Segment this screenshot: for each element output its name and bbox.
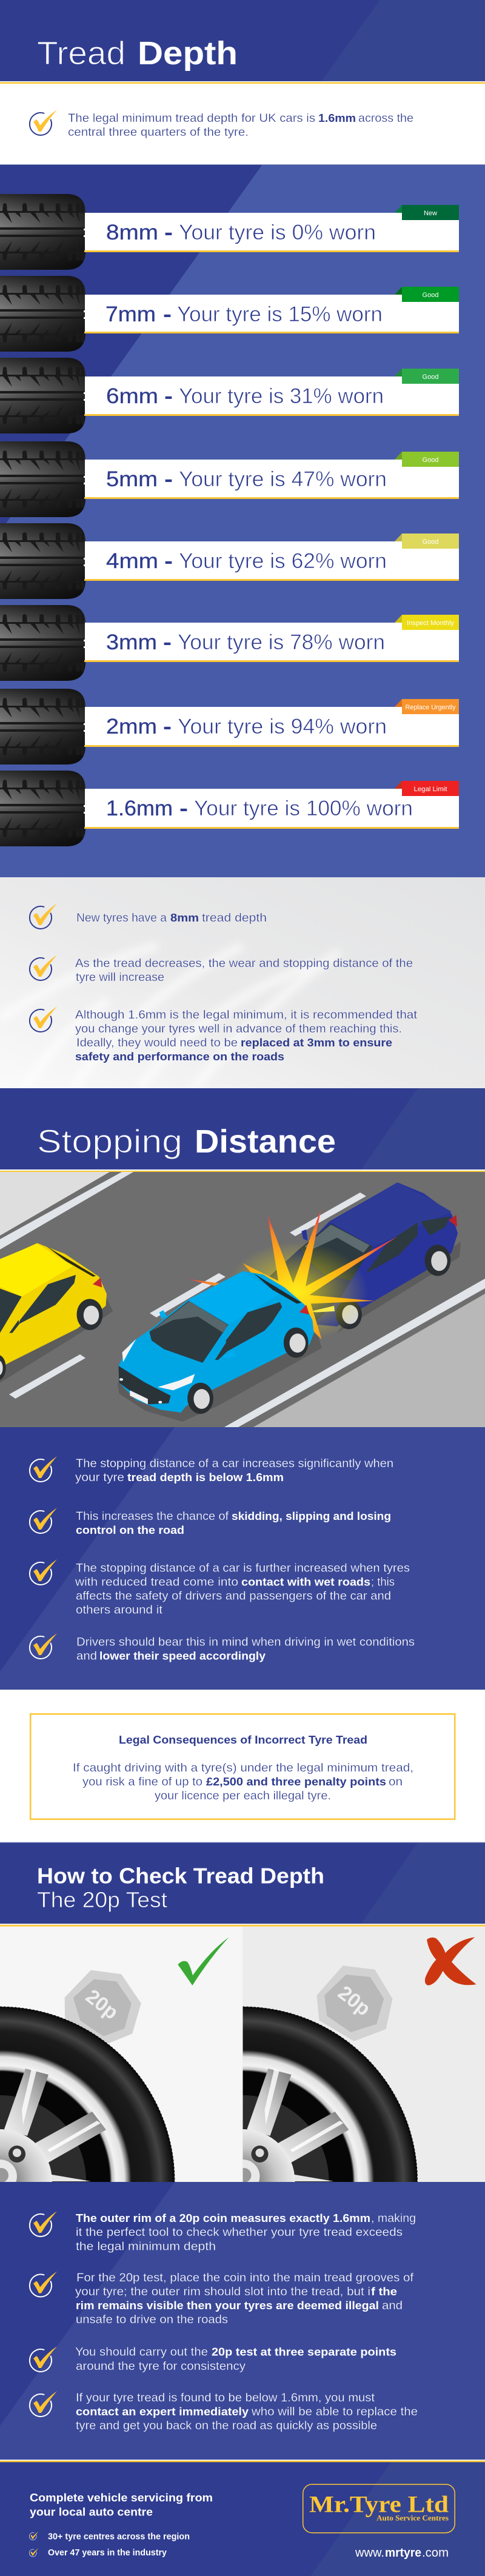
icon: check <box>30 955 57 980</box>
tyre image <box>0 523 85 599</box>
icon: coin 20p: 20p <box>334 1981 375 2020</box>
text: how to test: and <box>382 2300 403 2312</box>
text: 2mm: - <box>163 715 172 738</box>
text: website: .com <box>422 2546 449 2560</box>
text: 1.6mm: Your tyre is 100% worn <box>194 797 413 820</box>
ribbon: Good <box>395 287 459 302</box>
text: intro paragraph: 1.6mm <box>318 112 356 124</box>
text: website: mrtyre <box>385 2546 421 2560</box>
ribbon: Good: Good <box>423 292 438 299</box>
text: 5mm: Your tyre is 47% worn <box>179 467 387 491</box>
text: how to test: For the 20p test, place the coin into the main tread grooves of <box>76 2272 414 2284</box>
text: 7mm: - <box>163 303 172 326</box>
text: coin measure: the legal minimum depth <box>76 2241 216 2253</box>
text: how to test: f the <box>371 2285 397 2298</box>
icon: small check <box>29 2548 38 2557</box>
illustration: crash on the road <box>0 1172 485 1427</box>
text: 8mm new tyres: tread depth <box>202 912 267 925</box>
text: wet roads: others around it <box>76 1604 163 1616</box>
text: coin measure <box>76 2212 416 2253</box>
text: coin measure: The outer rim of a 20p coin measures exactly 1.6mm <box>76 2212 370 2224</box>
panel: stopping distance header <box>0 1088 485 1173</box>
text: fine details: you risk a fine of up to <box>82 1776 202 1788</box>
title: Tread Depth <box>37 35 238 72</box>
text: contact expert <box>76 2392 418 2432</box>
icon: check <box>30 2211 57 2236</box>
icon: check <box>30 1633 57 1659</box>
ribbon: Legal Limit: Legal Limit <box>413 786 447 793</box>
text: fine details: £2,500 and three penalty points <box>206 1775 386 1788</box>
text: wet roads: affects the safety of drivers and passengers of the car and <box>76 1590 391 1603</box>
text: wet roads: The stopping distance of a car is further increased when tyres <box>76 1562 410 1575</box>
icon: check <box>30 1456 57 1482</box>
text: 3mm: - <box>163 631 172 654</box>
ribbon: Good <box>395 534 459 549</box>
tyre image <box>0 358 85 433</box>
bar <box>84 295 459 333</box>
icon: coin 20p <box>65 1971 140 2042</box>
text: wear increases <box>75 957 413 984</box>
panel: intro legal minimum <box>30 110 413 139</box>
ribbon: Good: Good <box>423 538 438 546</box>
bar <box>84 707 459 747</box>
text: website <box>355 2546 449 2560</box>
text: lower speed: and <box>76 1650 97 1663</box>
text: 8mm: Your tyre is 0% worn <box>179 221 376 244</box>
text: wet roads: ; this <box>371 1576 395 1588</box>
text: three points <box>75 2345 396 2373</box>
row: 4mm <box>0 523 459 599</box>
bar <box>84 541 459 581</box>
text: contact expert: If your tyre tread is found to be below 1.6mm, you must <box>76 2392 375 2404</box>
heading: complete vehicle servicing: Complete vehicle servicing from <box>30 2491 213 2504</box>
illustration: wheel <box>0 2007 175 2182</box>
car: blue <box>118 1271 322 1422</box>
text: fine details: If caught driving with a tyre(s) under the legal minimum tread, <box>73 1762 413 1775</box>
icon: coin 20p <box>318 1966 392 2041</box>
title: How to Check Tread Depth: How to Check Tread Depth <box>37 1864 324 1888</box>
icon: check <box>30 1559 57 1585</box>
bar <box>84 623 459 662</box>
text: wet roads: with reduced tread come into <box>75 1576 238 1588</box>
text: skidding: This increases the chance of <box>76 1510 229 1523</box>
icon: check <box>30 110 57 135</box>
text: wet roads <box>75 1562 410 1616</box>
bar <box>84 789 459 829</box>
text: contact expert: tyre and get you back on the road as quickly as possible <box>76 2420 377 2432</box>
logo: Mr.Tyre Ltd <box>303 2484 455 2533</box>
text: contact expert: who will be able to replace the <box>251 2406 418 2418</box>
text: 2mm: 2mm <box>106 715 157 738</box>
text: how to test: rim remains visible then your tyres are deemed illegal <box>76 2299 379 2312</box>
text: 8mm new tyres <box>76 911 267 925</box>
row: 1.6mm <box>0 771 459 846</box>
text: recommended replacement: safety and performance on the roads <box>75 1050 284 1063</box>
ribbon: Legal Limit <box>395 781 459 796</box>
text: skidding: skidding, slipping and losing <box>232 1510 391 1522</box>
text: fine details: your licence per each illegal tyre. <box>155 1790 331 1802</box>
ribbon: New <box>395 205 459 220</box>
tyre image <box>0 689 85 764</box>
icon: coin 20p: 20p <box>82 1985 123 2024</box>
text: recommended replacement: Although 1.6mm is the legal minimum, it is recommended that <box>75 1009 418 1022</box>
text: stopping distance below 1.6mm: The stopping distance of a car increases significantly when <box>76 1457 393 1470</box>
text: 4mm: 4mm <box>106 549 158 573</box>
panel: 20p test passing <box>0 1927 242 2182</box>
callout: legal consequences <box>30 1714 455 1819</box>
text: 5mm: 5mm <box>106 467 158 491</box>
ribbon: Good: Good <box>423 373 438 381</box>
title: Stopping Distance: Distance <box>195 1123 336 1160</box>
text: intro paragraph: central three quarters of the tyre. <box>68 126 249 139</box>
text: intro paragraph: across the <box>358 112 413 125</box>
icon: green tick <box>178 1937 229 1986</box>
logo: Mr.Tyre Ltd: Mr.Tyre Ltd <box>309 2492 449 2517</box>
panel: new tyres notes <box>0 877 485 1088</box>
text: three points: You should carry out the <box>75 2346 208 2358</box>
text: 7mm: Your tyre is 15% worn <box>177 303 383 326</box>
text: lower speed: Drivers should bear this in mind when driving in wet conditions <box>76 1636 415 1649</box>
bar <box>84 376 459 416</box>
text: stopping distance below 1.6mm <box>75 1457 393 1484</box>
text: 8mm new tyres: 8mm <box>170 911 199 924</box>
panel: tread depth header <box>0 0 485 84</box>
text: website: www. <box>355 2546 384 2560</box>
row: 7mm <box>0 276 459 352</box>
ribbon: Good <box>395 452 459 467</box>
heading: complete vehicle servicing <box>30 2491 213 2518</box>
text: 8mm: 8mm <box>106 221 158 244</box>
illustration: wheel <box>242 2007 418 2182</box>
ribbon: Good <box>395 369 459 384</box>
ribbon: Inspect Monthly: Inspect Monthly <box>407 620 454 627</box>
text: 4mm: - <box>164 549 173 573</box>
title: Stopping Distance: Stopping <box>37 1123 182 1160</box>
text: 6mm: 6mm <box>106 384 158 408</box>
icon: check <box>30 1006 57 1032</box>
title: Stopping Distance <box>37 1123 336 1160</box>
text: wear increases: As the tread decreases, the wear and stopping distance of the <box>75 957 413 970</box>
icon: check <box>30 2346 57 2372</box>
text: fine details: on <box>389 1776 403 1788</box>
row: 2mm <box>0 689 459 764</box>
icon: check <box>30 2391 57 2417</box>
text: wear increases: tyre will increase <box>76 971 164 984</box>
panel: how to check header <box>0 1842 485 1927</box>
text: recommended replacement: replaced at 3mm to ensure <box>241 1036 392 1049</box>
tyre image <box>0 194 85 270</box>
car: yellow <box>0 1243 113 1383</box>
bar <box>84 213 459 252</box>
text: skidding: control on the road <box>76 1524 184 1536</box>
car: navy <box>269 1182 461 1333</box>
tyre image <box>0 276 85 352</box>
text: 47 years: Over 47 years in the industry <box>48 2548 167 2558</box>
bar <box>84 460 459 499</box>
text: 2mm: Your tyre is 94% worn <box>178 715 387 738</box>
text: lower speed: lower their speed accordingly <box>99 1650 266 1662</box>
text: three points: around the tyre for consistency <box>76 2360 246 2373</box>
glow behind burst <box>236 1245 364 1335</box>
text: how to test <box>75 2272 414 2326</box>
text: recommended replacement: Ideally, they would need to be <box>76 1037 238 1049</box>
tyre image <box>0 441 85 517</box>
text: how to test: your tyre; the outer rim should slot into the tread, but i <box>75 2286 370 2298</box>
text: 3mm: 3mm <box>106 631 157 654</box>
text: three points: 20p test at three separate points <box>212 2345 396 2358</box>
logo: Mr.Tyre Ltd: Auto Service Centres <box>376 2514 449 2522</box>
text: 5mm: - <box>164 467 173 491</box>
text: contact expert: contact an expert immediately <box>76 2405 249 2418</box>
text: 30+ centres: 30+ tyre centres across the region <box>48 2532 190 2541</box>
ribbon: New: New <box>424 210 437 217</box>
row: 5mm <box>0 441 459 517</box>
text: 1.6mm: 1.6mm <box>106 797 173 820</box>
text: coin measure: , making <box>371 2212 416 2225</box>
text: 8mm new tyres: New tyres have a <box>76 912 167 925</box>
ribbon: Replace Urgently: Replace Urgently <box>405 704 456 711</box>
text: recommended replacement <box>75 1009 418 1063</box>
text: intro paragraph: The legal minimum tread depth for UK cars is <box>68 112 315 125</box>
title: Tread Depth: Tread <box>37 35 125 72</box>
panel: 20p test failing <box>242 1927 485 2182</box>
icon: red cross <box>425 1937 477 1986</box>
text: 1.6mm: - <box>179 797 188 820</box>
icon: impact burst <box>189 1209 398 1339</box>
tyre image <box>0 605 85 681</box>
title: Tread Depth: Depth <box>138 35 238 72</box>
panel: footer <box>0 2460 485 2576</box>
text: fine details <box>73 1762 413 1802</box>
row: 3mm <box>0 605 459 681</box>
text: 6mm: - <box>164 384 173 408</box>
text: 3mm: Your tyre is 78% worn <box>178 631 385 654</box>
subtitle: The 20p Test: The 20p Test <box>37 1887 167 1912</box>
text: 8mm: - <box>164 221 173 244</box>
text: stopping distance below 1.6mm: tread depth is below 1.6mm <box>127 1471 284 1484</box>
text: recommended replacement: you change your tyres well in advance of them reaching this. <box>75 1023 402 1035</box>
icon: check <box>30 2271 57 2297</box>
row: 8mm <box>0 194 459 270</box>
ribbon: Inspect Monthly <box>395 615 459 630</box>
text: lower speed <box>76 1636 415 1663</box>
text: intro paragraph <box>68 112 413 139</box>
text: skidding <box>76 1510 391 1536</box>
heading: complete vehicle servicing: your local auto centre <box>30 2505 153 2518</box>
text: 6mm: Your tyre is 31% worn <box>179 384 384 408</box>
text: how to test: unsafe to drive on the roads <box>76 2313 228 2326</box>
ribbon: Good: Good <box>423 457 438 464</box>
panel: stopping distance notes <box>0 1427 485 1690</box>
ribbon: Replace Urgently <box>395 699 459 714</box>
row: 6mm <box>0 358 459 433</box>
text: stopping distance below 1.6mm: your tyre <box>75 1471 124 1484</box>
tyre image <box>0 771 85 846</box>
text: coin measure: it the perfect tool to check whether your tyre tread exceeds <box>76 2226 403 2239</box>
text: 7mm: 7mm <box>105 303 156 326</box>
text: wet roads: contact with wet roads <box>241 1575 370 1588</box>
heading: legal consequences: Legal Consequences of Incorrect Tyre Tread <box>119 1733 367 1746</box>
icon: check <box>30 1508 57 1533</box>
text: 4mm: Your tyre is 62% worn <box>179 549 387 573</box>
panel: 20p test notes <box>0 2182 485 2460</box>
icon: check <box>30 903 57 929</box>
icon: small check <box>29 2532 38 2540</box>
panel: tread depth scale <box>0 164 485 877</box>
